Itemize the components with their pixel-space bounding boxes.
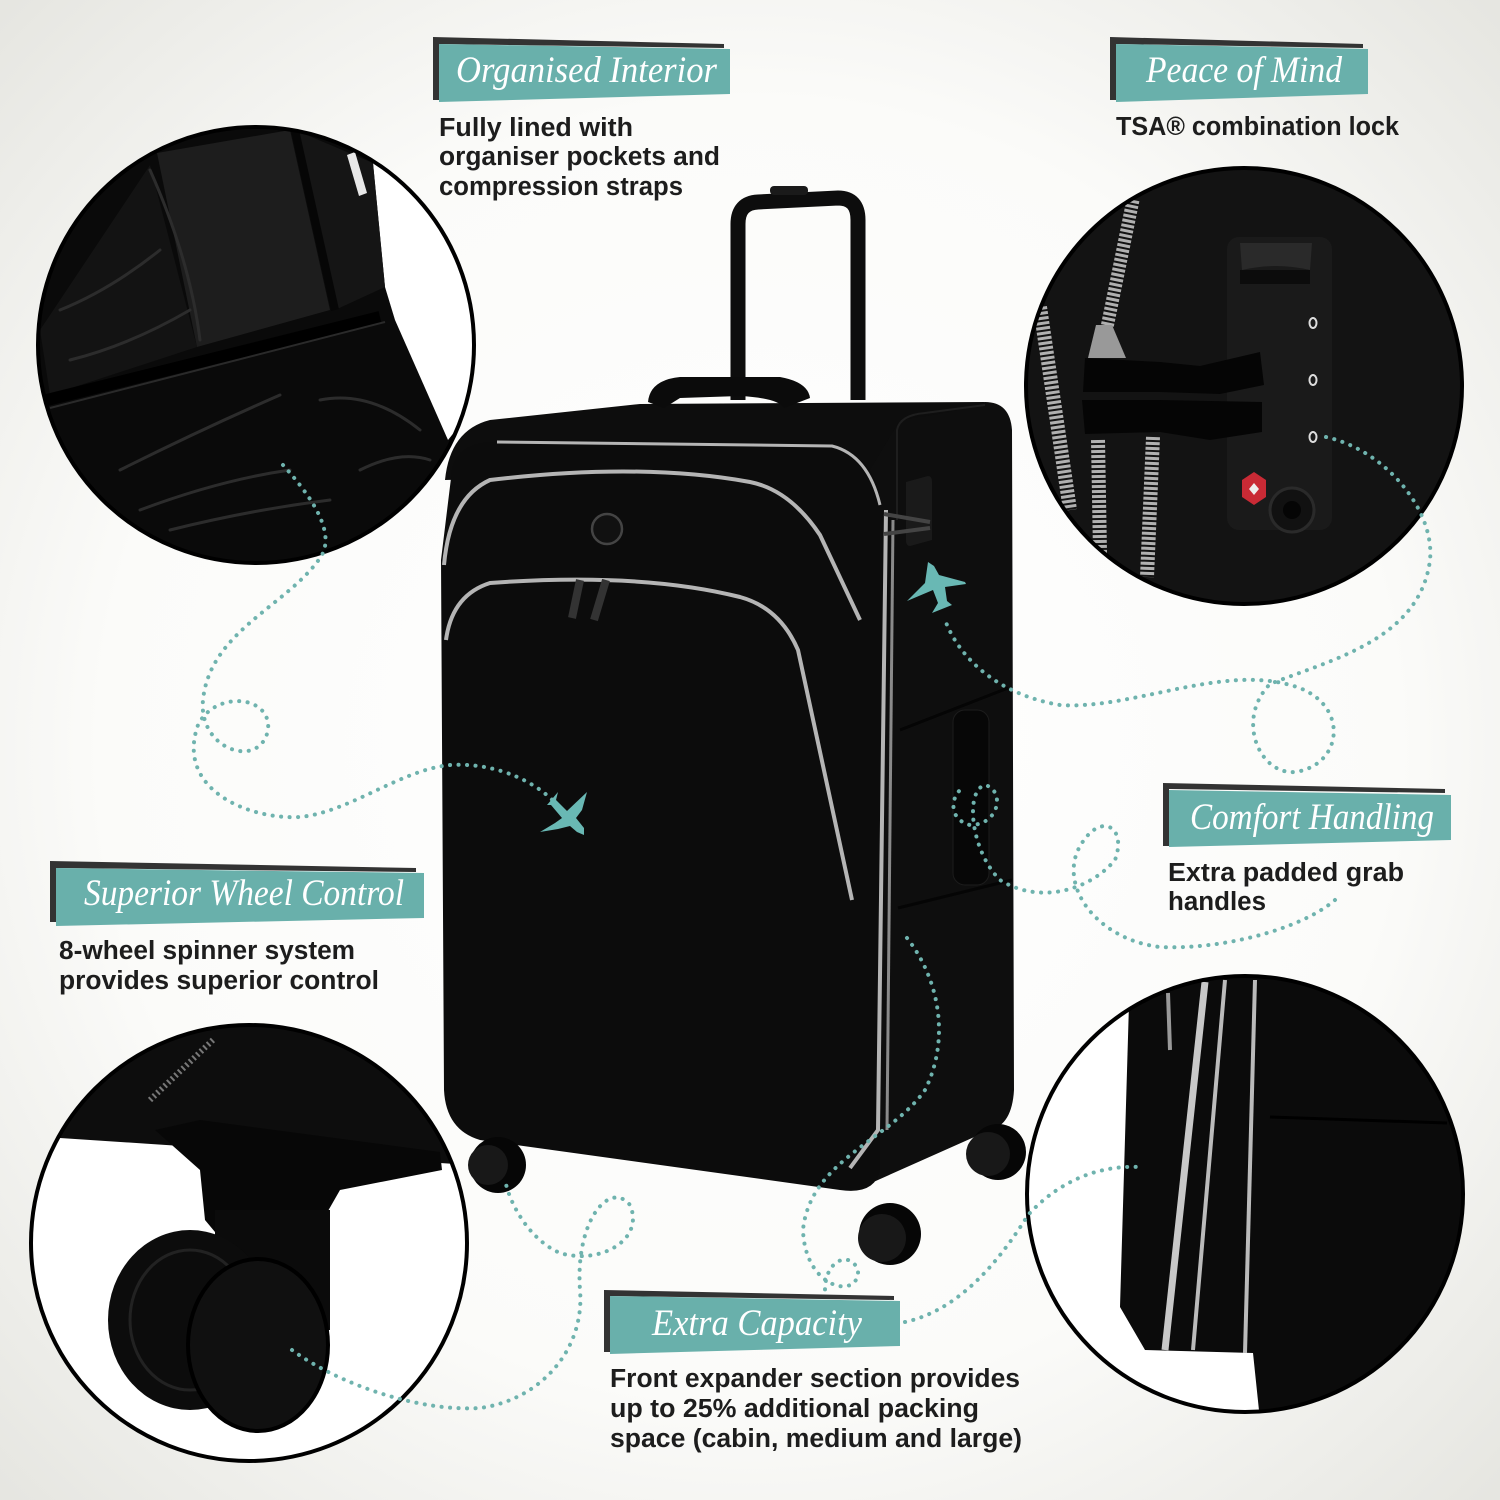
side lock xyxy=(906,476,932,546)
plane: side xyxy=(907,562,966,613)
dotted route: lock to plane xyxy=(945,437,1430,772)
callout: organised interior xyxy=(433,37,730,201)
body text: Front expander section provides xyxy=(610,1365,1020,1393)
dotted route: handle xyxy=(953,785,1335,947)
white gap beside lid xyxy=(373,164,472,440)
suitcase xyxy=(441,186,1026,1265)
telescopic handle xyxy=(738,198,858,400)
body text xyxy=(1168,859,1404,916)
outer zip xyxy=(497,442,880,505)
callout: peace of mind xyxy=(1110,37,1400,141)
body text: Extra padded grab xyxy=(1168,859,1404,887)
callout: extra capacity xyxy=(604,1290,1022,1453)
dotted route: interior to plane xyxy=(194,465,557,817)
heading xyxy=(604,1290,900,1354)
dotted route: wheels xyxy=(292,1180,633,1408)
photo: lock xyxy=(1020,165,1470,615)
body text: 8-wheel spinner system xyxy=(59,937,355,965)
lining left xyxy=(40,165,197,395)
body text: space (cabin, medium and large) xyxy=(610,1425,1022,1453)
heading: Superior Wheel Control xyxy=(84,873,404,914)
TSA diamond xyxy=(1242,472,1266,505)
side seams xyxy=(898,688,1012,908)
heading xyxy=(433,37,730,102)
body text: up to 25% additional packing xyxy=(610,1395,979,1423)
tag xyxy=(347,152,367,196)
top carry handle xyxy=(648,377,810,408)
circle outline: lock xyxy=(1026,168,1462,604)
body text xyxy=(59,937,379,995)
photo: organised interior xyxy=(40,129,454,561)
number wheels xyxy=(1310,318,1316,328)
lock body xyxy=(1227,237,1332,530)
pocket zip upper xyxy=(444,471,860,620)
heading: Peace of Mind xyxy=(1145,50,1342,91)
callout: comfort handling xyxy=(1163,783,1451,916)
zipper pulls xyxy=(572,580,606,620)
lock hooks xyxy=(884,514,930,534)
heading: Comfort Handling xyxy=(1190,797,1434,838)
side handle xyxy=(953,710,989,885)
body text: compression straps xyxy=(439,173,683,201)
hooks xyxy=(1083,352,1264,394)
dial xyxy=(1270,488,1314,532)
body text: Fully lined with xyxy=(439,114,633,142)
creases xyxy=(60,170,430,530)
side panel xyxy=(860,402,1014,1188)
body text: handles xyxy=(1168,888,1266,916)
heading xyxy=(1110,37,1368,102)
photo: expander xyxy=(1090,978,1461,1410)
heading xyxy=(50,861,424,926)
slider xyxy=(1088,325,1126,358)
body text: organiser pockets and xyxy=(439,143,720,171)
front panel xyxy=(441,442,880,1191)
body text: TSA® combination lock xyxy=(1116,113,1400,141)
expander zips xyxy=(850,510,886,1168)
dotted route: capacity xyxy=(803,938,939,1290)
lining right xyxy=(295,130,385,310)
plane: front xyxy=(540,792,587,835)
photo: wheel xyxy=(30,1020,470,1465)
dotted route: capacity to circle xyxy=(905,1167,1140,1322)
heading xyxy=(1163,783,1451,847)
mesh panel xyxy=(157,130,330,347)
seam xyxy=(47,317,380,400)
pocket zip lower xyxy=(446,580,852,900)
logo xyxy=(592,514,622,544)
body text xyxy=(439,114,720,201)
zips xyxy=(1040,200,1153,577)
wheels xyxy=(470,1137,526,1193)
circle outline: wheel xyxy=(31,1025,467,1461)
heading: Extra Capacity xyxy=(651,1303,863,1344)
callout: superior wheel control xyxy=(50,861,424,995)
circle outline: interior xyxy=(38,127,474,563)
body text: provides superior control xyxy=(59,967,379,995)
heading: Organised Interior xyxy=(456,50,718,91)
body text xyxy=(610,1365,1022,1453)
top panel xyxy=(445,402,985,480)
circle outline: expander xyxy=(1027,976,1463,1412)
